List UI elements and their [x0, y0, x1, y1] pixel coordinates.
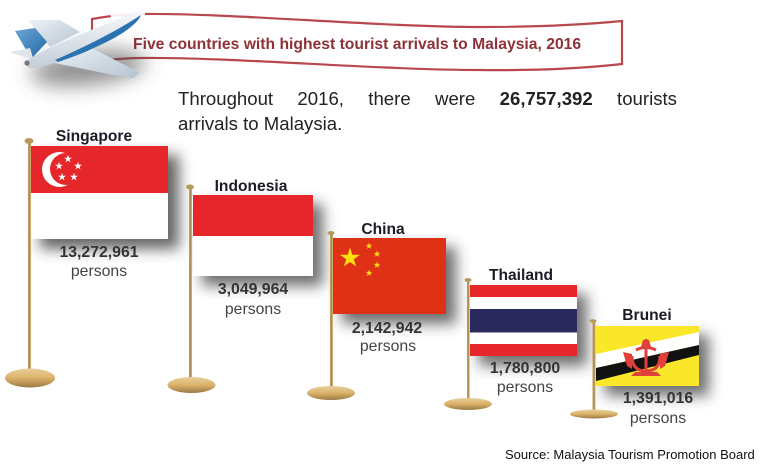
intro text: Throughout 2016, there were 26,757,392 tourists [178, 88, 677, 109]
Thailand value: 1,780,800 [490, 360, 560, 377]
flag: Thailand [444, 267, 577, 410]
intro text [178, 88, 677, 134]
title ribbon [92, 14, 622, 70]
China label: China [361, 221, 405, 238]
intro text: arrivals to Malaysia. [178, 113, 342, 134]
Indonesia value: 3,049,964 [218, 281, 288, 298]
flag: China: persons [360, 338, 416, 355]
China value: 2,142,942 [352, 320, 422, 337]
flag: Brunei [570, 307, 699, 427]
Singapore value: 13,272,961 [59, 244, 139, 261]
source note: Source: Malaysia Tourism Promotion Board [505, 447, 755, 462]
flag: Singapore: persons [71, 263, 127, 280]
icon: airplane [10, 10, 147, 91]
Brunei value: 1,391,016 [623, 390, 693, 407]
flag: Indonesia [168, 178, 313, 393]
flag: Brunei: persons [630, 410, 686, 427]
Brunei label: Brunei [622, 307, 672, 324]
Indonesia label: Indonesia [215, 178, 288, 195]
flag: Indonesia: persons [225, 301, 281, 318]
flag: Singapore [5, 128, 168, 388]
flag shadows [40, 155, 709, 396]
flag: China [307, 221, 446, 400]
Singapore label: Singapore [56, 128, 132, 145]
title text: Five countries with highest tourist arrivals to Malaysia, 2016 [133, 36, 581, 53]
Thailand label: Thailand [489, 267, 553, 284]
Singapore pole [5, 138, 55, 388]
flag: Thailand: persons [497, 379, 553, 396]
